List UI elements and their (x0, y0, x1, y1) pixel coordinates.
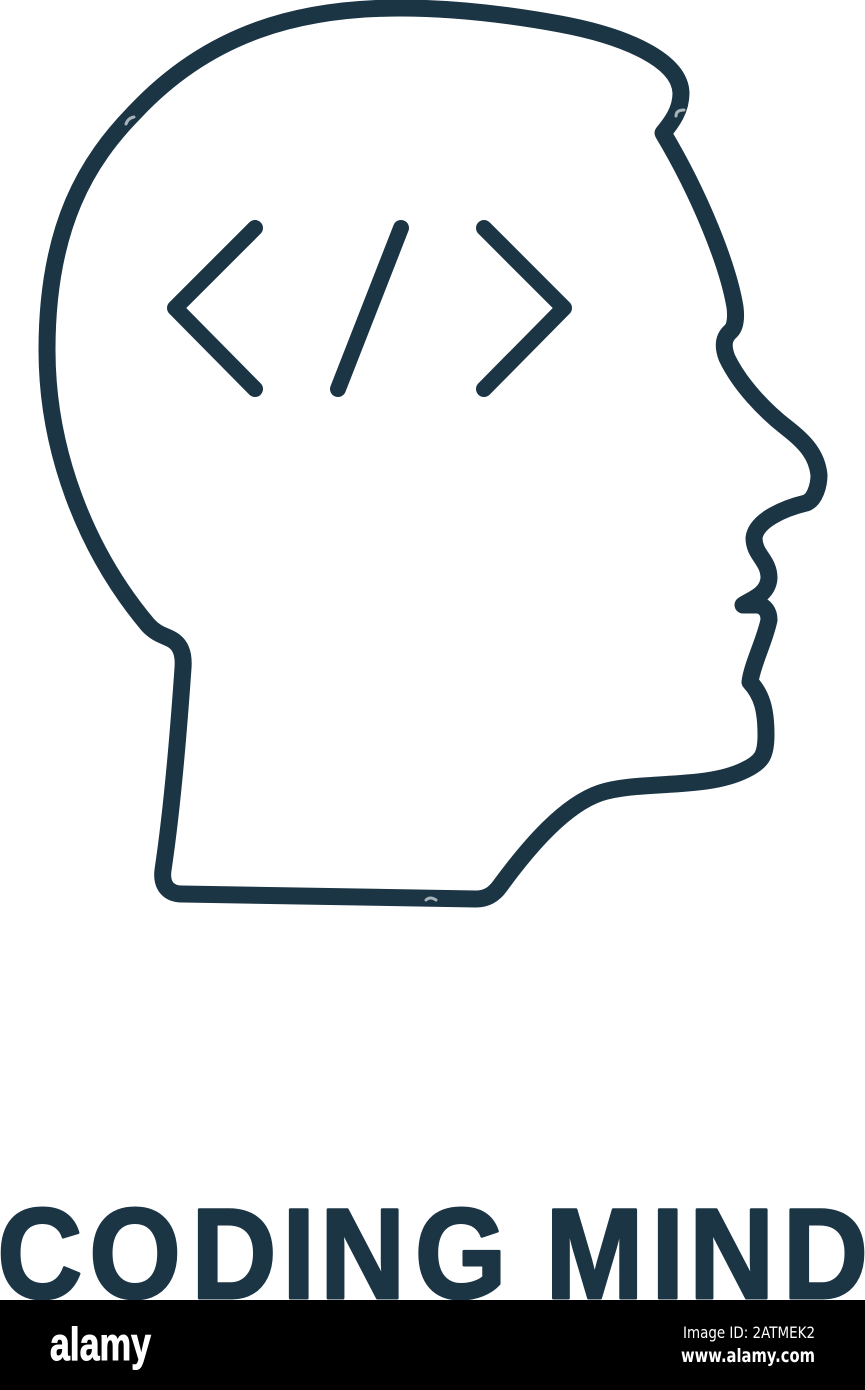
footer image id: Image ID: 2ATMEK2 (683, 1323, 815, 1342)
right angle bracket (484, 228, 564, 389)
slash (338, 228, 401, 389)
icon: head profile outline (47, 8, 819, 899)
footer logo: alamy: alamy (50, 1318, 151, 1370)
title: coding mind: CODINGMIND (0, 1184, 865, 1326)
footer bar (0, 1300, 865, 1390)
footer website: www.alamy.com (681, 1345, 815, 1367)
icon: code symbol (175, 228, 564, 389)
left angle bracket (175, 228, 255, 389)
